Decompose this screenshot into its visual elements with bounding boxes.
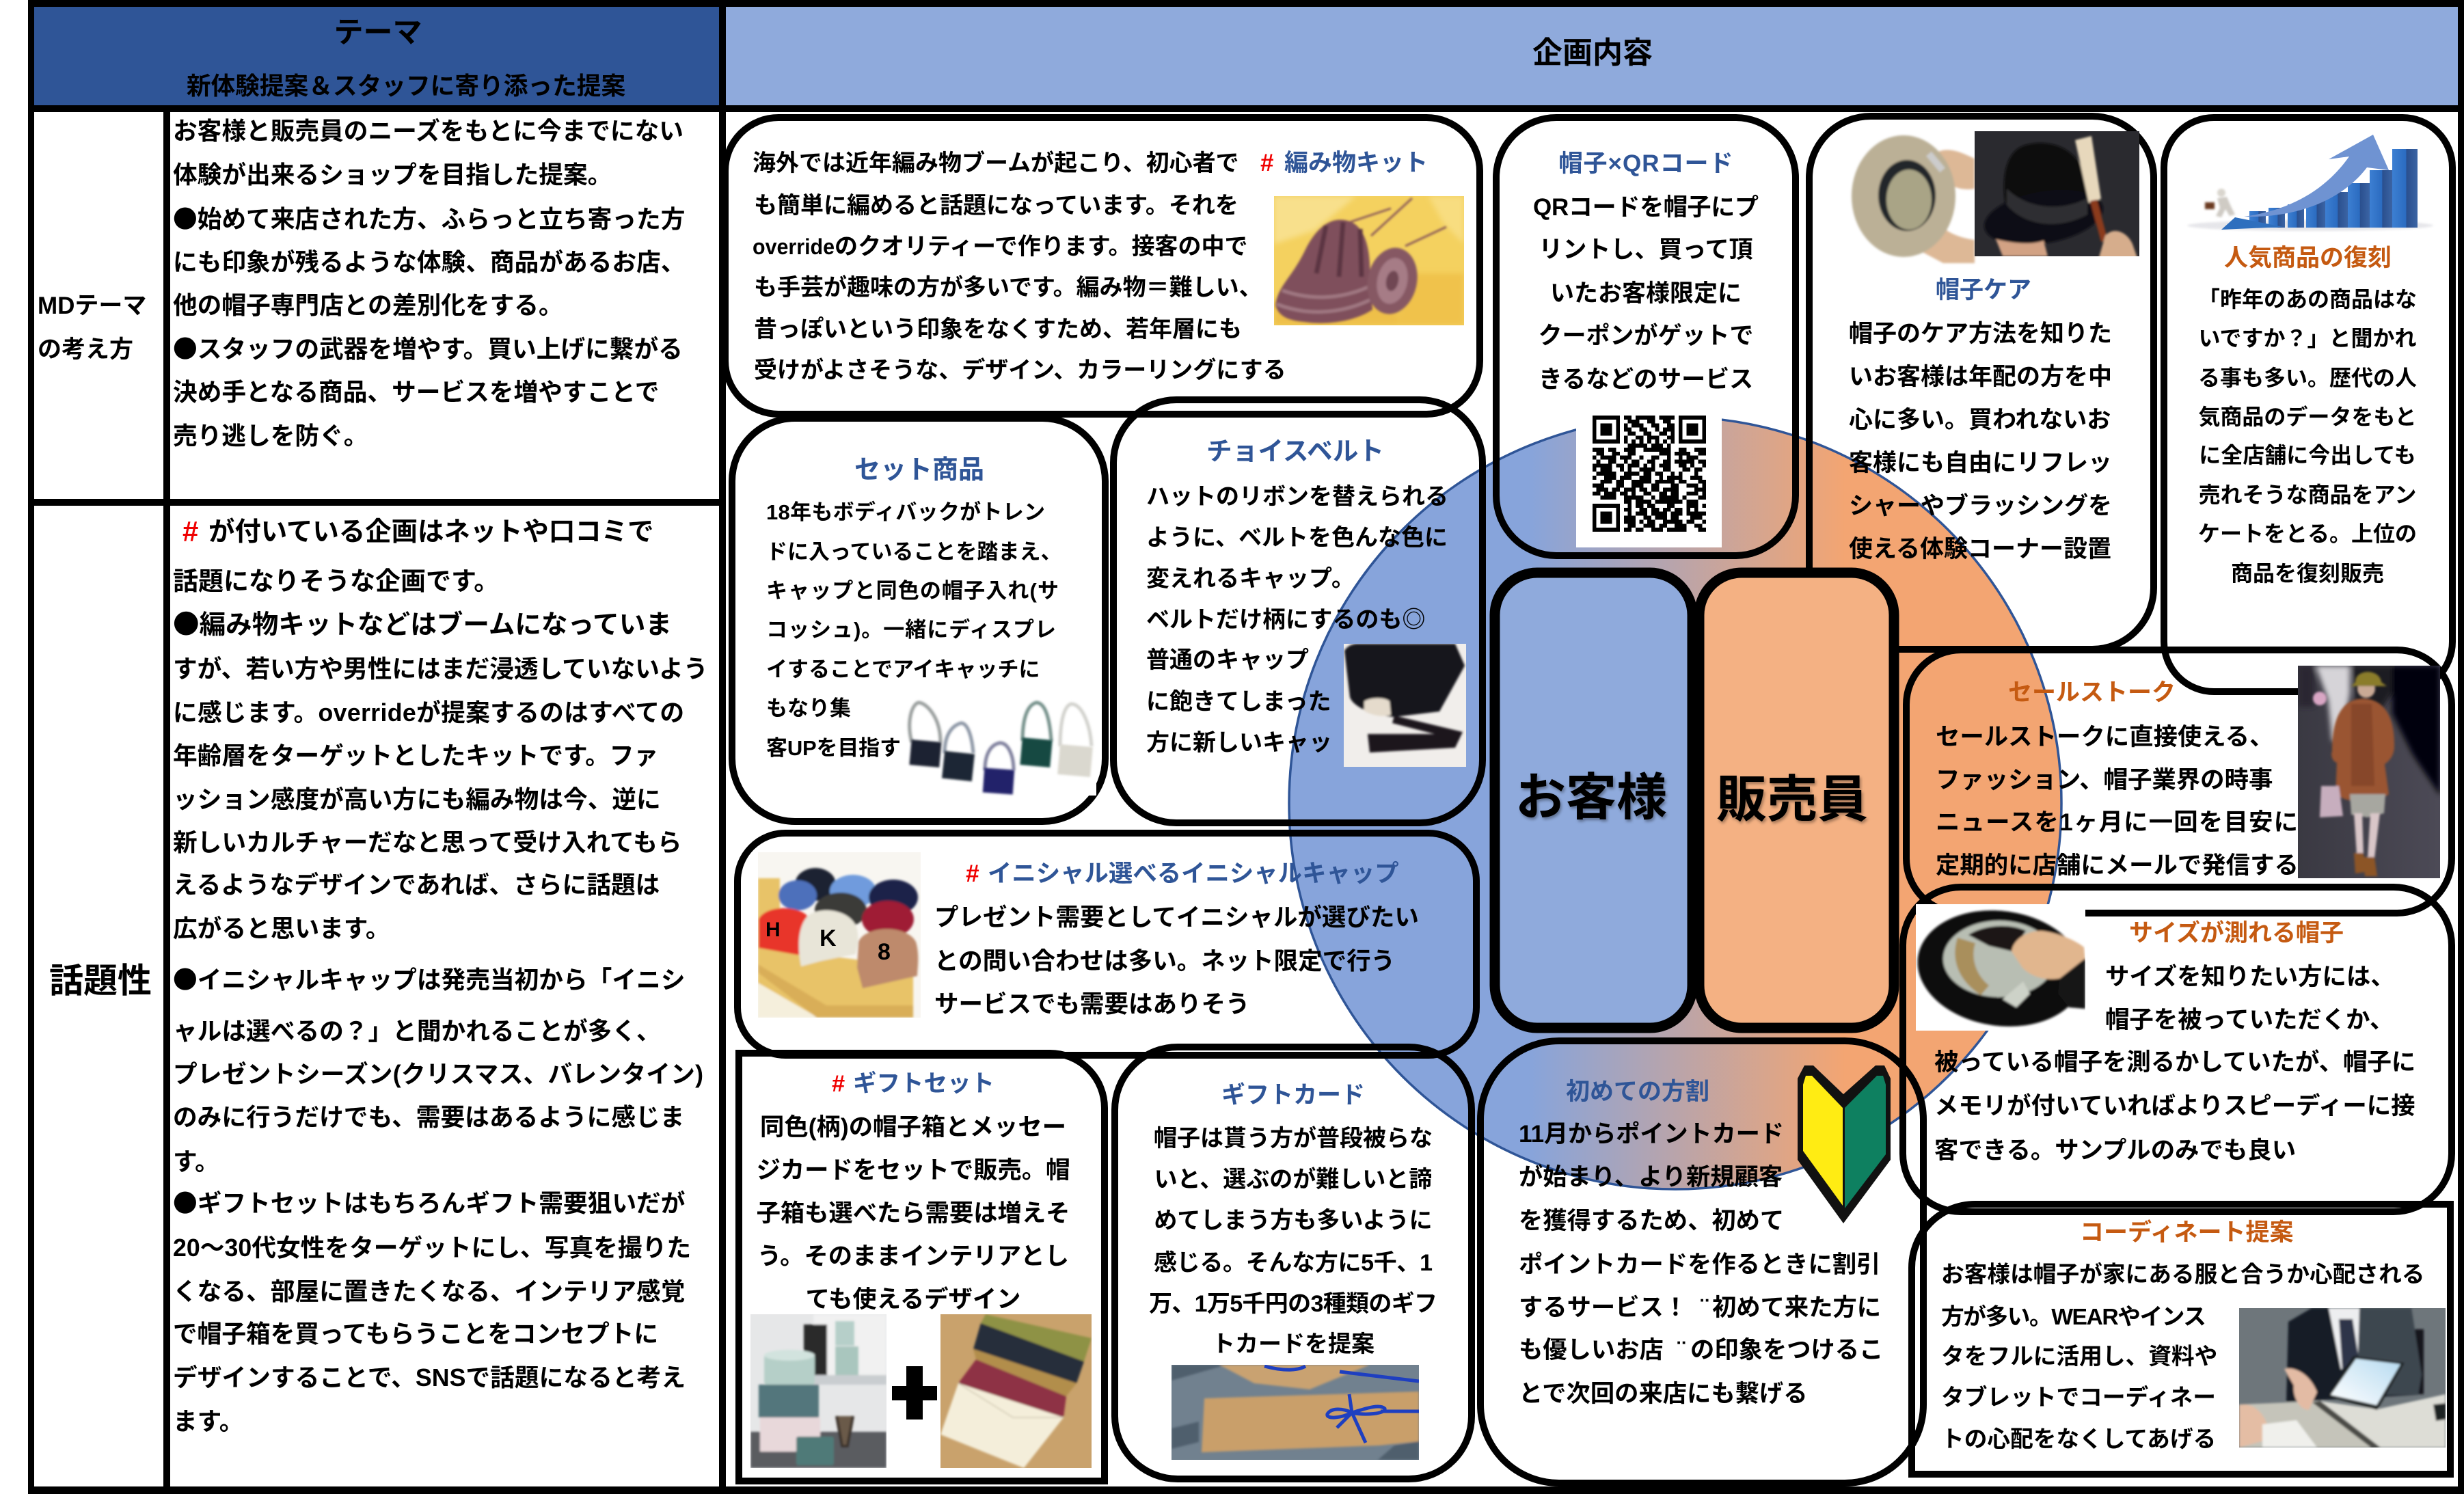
text block: topicality: のみに行うだけでも、需要はあるように感じま bbox=[173, 1104, 684, 1131]
header: theme bbox=[34, 7, 719, 105]
panel: gift set bbox=[739, 1053, 1105, 1481]
sales talk body text: 定期的に店舗にメールで発信する bbox=[1936, 852, 2299, 879]
text block: topicality: ●ギフトセットはもちろんギフト需要狙いだが bbox=[173, 1184, 685, 1219]
knitting kit body text bbox=[753, 150, 1286, 383]
heading: plan content: 企画内容 bbox=[1532, 36, 1653, 70]
text block: topicality: ●編み物キットなどはブームになっていま bbox=[173, 603, 672, 642]
revival body text bbox=[2198, 287, 2417, 586]
text block: MD theme thinking: 体験が出来るショップを目指した提案。 bbox=[173, 161, 612, 189]
text block: topicality: くなる、部屋に置きたくなる、インテリア感覚 bbox=[173, 1278, 685, 1305]
center box: sales staff: 販売員 bbox=[1716, 771, 1868, 828]
text block: MD theme thinking: 他の帽子専門店との差別化をする。 bbox=[173, 292, 563, 319]
photo: cap with belt bbox=[1344, 644, 1466, 767]
photo: hat boxes bbox=[750, 1314, 886, 1468]
photo: beige hat with hand bbox=[1852, 135, 1975, 263]
text block: topicality: すが、若い方や男性にはまだ浸透していないよう bbox=[173, 655, 708, 683]
coordinate body text: 方が多い。WEARやインス bbox=[1941, 1303, 2206, 1330]
row label: topicality: 話題性 bbox=[49, 962, 152, 1000]
text block: topicality: 年齢層をターゲットとしたキットです。ファ bbox=[173, 742, 658, 770]
choice belt body text bbox=[1146, 484, 1448, 756]
photo: initial caps: 8 bbox=[878, 939, 891, 965]
gift set body text: う。そのままインテリアとし bbox=[757, 1243, 1069, 1270]
gift card body text: 感じる。そんな方に5千、1 bbox=[1154, 1250, 1433, 1276]
revival body text: ケートをとる。上位の bbox=[2198, 521, 2417, 546]
panel: choice belt bbox=[1113, 400, 1483, 823]
knitting kit title: # bbox=[1260, 150, 1273, 176]
center box: customers: お客様 bbox=[1515, 769, 1667, 826]
gift card body text: いと、選ぶのが難しいと諦 bbox=[1154, 1166, 1432, 1193]
knitting kit body text: 海外では近年編み物ブームが起こり、初心者で bbox=[753, 150, 1239, 176]
size hat body text: 被っている帽子を測るかしていたが、帽子に bbox=[1934, 1048, 2415, 1076]
panel: hat care bbox=[1809, 116, 2154, 649]
text block: topicality: 20～30代女性をターゲットにし、写真を撮りた bbox=[173, 1234, 691, 1262]
size hat body text: サイズを知りたい方には、 bbox=[2105, 963, 2395, 990]
initial cap body text bbox=[934, 904, 1419, 1018]
set product body text bbox=[766, 500, 1061, 760]
choice belt body text: 普通のキャップ bbox=[1146, 647, 1309, 673]
QR body text: QRコードを帽子にプ bbox=[1533, 194, 1759, 221]
row label: MD theme bbox=[38, 293, 146, 363]
text block: topicality bbox=[173, 515, 708, 1435]
knitting kit body text: 受けがよさそうな、デザイン、カラーリングにする bbox=[754, 357, 1286, 383]
size hat body text: 帽子を被っていただくか、 bbox=[2105, 1006, 2394, 1033]
coordinate body text: お客様は帽子が家にある服と合うか心配される bbox=[1941, 1261, 2424, 1288]
revival body text: 売れそうな商品をアン bbox=[2199, 483, 2416, 507]
choice belt body text: ように、ベルトを色んな色に bbox=[1146, 525, 1448, 551]
revival body text: 「昨年のあの商品はな bbox=[2198, 287, 2417, 312]
hat care body text: 心に多い。買われないお bbox=[1849, 407, 2111, 433]
first-timer discount body text: が始まり、より新規顧客 bbox=[1519, 1164, 1783, 1191]
set product body text: キャップと同色の帽子入れ(サ bbox=[766, 579, 1059, 603]
gift card body text: 万、1万5千円の3種類のギフ bbox=[1149, 1291, 1437, 1317]
size hat body text: メモリが付いていればよりスピーディーに接 bbox=[1934, 1092, 2415, 1119]
first-timer discount body text bbox=[1519, 1121, 1883, 1407]
text block: topicality: ます。 bbox=[173, 1408, 243, 1435]
size hat title: サイズが測れる帽子 bbox=[2129, 919, 2344, 947]
center box: customers bbox=[1495, 573, 1692, 1028]
QR body text: リントし、買って頂 bbox=[1539, 236, 1753, 263]
knitting kit body text: も簡単に編めると話題になっています。それを bbox=[754, 193, 1238, 219]
hat care body text: シャーやブラッシングを bbox=[1849, 492, 2112, 519]
coordinate body text: トの心配をなくしてあげる bbox=[1941, 1426, 2216, 1452]
knitting kit body text: も手芸が趣味の方が多いです。編み物＝難しい、 bbox=[754, 274, 1262, 301]
gift set body text: 子箱も選べたら需要は増えそ bbox=[757, 1200, 1070, 1227]
sales talk body text bbox=[1936, 723, 2299, 879]
text block: topicality: ャルは選べるの？」と聞かれることが多く、 bbox=[173, 1018, 661, 1045]
first-timer discount body text: の印象をつけるこ bbox=[1690, 1337, 1883, 1363]
text block: topicality: 話題になりそうな企画です。 bbox=[173, 567, 499, 595]
initial cap body text: プレゼント需要としてイニシャルが選びたい bbox=[934, 904, 1419, 931]
sales talk body text: セールストークに直接使える、 bbox=[1936, 723, 2273, 750]
photo: initial caps: H bbox=[766, 919, 781, 941]
text block: topicality: ●イニシャルキャップは発売当初から「イニシ bbox=[173, 961, 685, 996]
gift set title: # bbox=[832, 1071, 845, 1097]
set product body text: もなり集 bbox=[766, 696, 851, 720]
knitting kit title: 編み物キット bbox=[1284, 150, 1428, 176]
panel: popular product revival bbox=[2164, 118, 2452, 692]
photo: initial caps bbox=[758, 852, 921, 1018]
photo: initial caps: K bbox=[820, 925, 837, 951]
header: plan content bbox=[726, 7, 2458, 105]
text block: topicality: プレゼントシーズン(クリスマス、バレンタイン) bbox=[173, 1061, 703, 1088]
gift set body text: 同色(柄)の帽子箱とメッセー bbox=[760, 1114, 1066, 1141]
coordinate title: コーディネート提案 bbox=[2080, 1219, 2294, 1246]
gift set body text: ても使えるデザイン bbox=[806, 1286, 1020, 1313]
hat care title: 帽子ケア bbox=[1936, 277, 2031, 303]
set product title: セット商品 bbox=[854, 456, 984, 485]
panel: QR code bbox=[1496, 118, 1796, 556]
set product body text: ドに入っていることを踏まえ、 bbox=[766, 540, 1061, 564]
photo: envelopes bbox=[940, 1314, 1092, 1468]
sales talk body text: ファッション、帽子業界の時事 bbox=[1936, 766, 2273, 793]
gift set title: ギフトセット bbox=[853, 1071, 994, 1097]
initial cap title: # bbox=[966, 860, 979, 887]
text block: topicality: が付いている企画はネットや口コミで bbox=[208, 517, 653, 547]
revival body text: る事も多い。歴代の人 bbox=[2198, 366, 2417, 390]
text block: topicality: に感じます。overrideが提案するのはすべての bbox=[173, 699, 684, 726]
QR body text: クーポンがゲットで bbox=[1538, 323, 1754, 349]
hat care body text: 客様にも自由にリフレッ bbox=[1849, 450, 2112, 476]
coordinate body text: タブレットでコーディネー bbox=[1941, 1384, 2216, 1411]
gift set body text: ジカードをセットで販売。帽 bbox=[757, 1157, 1070, 1184]
first-timer discount body text: 初めて来た方に bbox=[1712, 1294, 1881, 1321]
revival title: 人気商品の復刻 bbox=[2224, 245, 2392, 271]
knitting kit body text: override bbox=[753, 234, 835, 259]
text block: MD theme thinking: ●スタッフの武器を増やす。買い上げに繋がる bbox=[173, 330, 683, 365]
row label: MD theme: MDテーマ bbox=[38, 293, 146, 319]
subtitle: theme: 新体験提案＆スタッフに寄り添った提案 bbox=[187, 72, 625, 100]
first-timer discount body text: するサービス！ bbox=[1519, 1294, 1688, 1321]
gift card title: ギフトカード bbox=[1221, 1082, 1365, 1109]
set product body text: コッシュ)。一緒にディスプレ bbox=[766, 618, 1056, 642]
text block: MD theme thinking: 決め手となる商品、サービスを増やすことで bbox=[173, 379, 660, 406]
gift set body text bbox=[757, 1114, 1070, 1313]
photo: staff with tablet bbox=[2239, 1308, 2446, 1448]
choice belt body text: ベルトだけ柄にするのも◎ bbox=[1146, 601, 1425, 634]
text block: topicality: # bbox=[182, 515, 198, 547]
set product body text: 18年もボディバックがトレン bbox=[766, 500, 1045, 524]
panel: hat that measures size bbox=[1903, 887, 2452, 1212]
gift card body text bbox=[1149, 1125, 1437, 1357]
QR body text: きるなどのサービス bbox=[1539, 366, 1753, 393]
panel: sales talk bbox=[1906, 650, 2452, 913]
image: rising bar chart and arrow bbox=[2187, 135, 2433, 231]
text block: topicality: デザインすることで、SNSで話題になると考え bbox=[173, 1364, 686, 1391]
choice belt body text: 変えれるキャップ。 bbox=[1146, 566, 1355, 592]
first-timer discount body text: 11月からポイントカード bbox=[1519, 1121, 1784, 1147]
set product body text: 客UPを目指す bbox=[766, 736, 901, 760]
initial cap body text: サービスでも需要はありそう bbox=[934, 990, 1250, 1018]
background circle linking customer and staff bbox=[1289, 417, 2061, 1189]
revival body text: 商品を復刻販売 bbox=[2231, 561, 2384, 586]
text block: topicality: す。 bbox=[173, 1148, 219, 1176]
revival body text: に全店舗に今出しても bbox=[2199, 443, 2416, 467]
choice belt body text: ハットのリボンを替えられる bbox=[1146, 484, 1448, 510]
text block: MD theme thinking bbox=[173, 118, 685, 450]
size hat body text bbox=[1934, 963, 2415, 1164]
gift card body text: トカードを提案 bbox=[1212, 1331, 1375, 1357]
set product body text: イすることでアイキャッチに bbox=[766, 657, 1040, 681]
icon: beginner driver mark bbox=[1798, 1065, 1891, 1223]
QR title: 帽子×QRコード bbox=[1558, 150, 1733, 177]
choice belt body text: に飽きてしまった bbox=[1146, 689, 1331, 715]
first-timer discount body text: を獲得するため、初めて bbox=[1519, 1208, 1784, 1234]
hat care body text: 帽子のケア方法を知りた bbox=[1849, 321, 2112, 347]
photo: black hat and brush bbox=[1975, 131, 2139, 260]
photo: runway model in fur coat bbox=[2298, 666, 2440, 878]
panel: coordinate proposal bbox=[1912, 1204, 2450, 1474]
panel: first-timer discount bbox=[1480, 1041, 1923, 1483]
panel: set product bbox=[732, 418, 1105, 821]
icon: plus sign bbox=[892, 1366, 937, 1420]
coordinate body text: タをフルに活用し、資料や bbox=[1941, 1344, 2217, 1370]
revival body text: いですか？」と聞かれ bbox=[2198, 326, 2417, 351]
initial cap body text: との問い合わせは多い。ネット限定で行う bbox=[934, 947, 1395, 975]
QR code image bbox=[1576, 410, 1722, 547]
text block: MD theme thinking: お客様と販売員のニーズをもとに今までにない bbox=[173, 118, 683, 145]
coordinate body text bbox=[1941, 1261, 2424, 1452]
first-timer discount body text: ポイントカードを作るときに割引 bbox=[1519, 1251, 1880, 1278]
knitting kit body text: 昔っぽいという印象をなくすため、若年層にも bbox=[754, 316, 1242, 342]
sales talk body text: ニュースを1ヶ月に一回を目安に bbox=[1936, 809, 2298, 836]
first-timer discount body text: も優しいお店 bbox=[1519, 1337, 1664, 1363]
photo: sacoche bags bbox=[906, 700, 1096, 796]
gift card body text: めてしまう方も多いように bbox=[1154, 1208, 1433, 1234]
center box: sales staff bbox=[1699, 573, 1894, 1028]
heading: theme: テーマ bbox=[334, 16, 422, 49]
knitting kit body text: のクオリティーで作ります。接客の中で bbox=[835, 234, 1248, 260]
size hat body text: 客できる。サンプルのみでも良い bbox=[1934, 1137, 2296, 1164]
photo: knit hat and yarn bbox=[1274, 196, 1464, 325]
QR body text: いたお客様限定に bbox=[1550, 280, 1742, 307]
text block: MD theme thinking: 売り逃しを防ぐ。 bbox=[173, 422, 368, 450]
panel: gift card bbox=[1115, 1047, 1472, 1479]
panel: initial cap bbox=[737, 833, 1476, 1055]
hat care body text bbox=[1849, 321, 2112, 562]
QR body text bbox=[1533, 194, 1759, 393]
text block: topicality: えるようなデザインであれば、さらに話題は bbox=[173, 871, 660, 899]
text block: topicality: 新しいカルチャーだなと思って受け入れてもら bbox=[173, 829, 681, 856]
revival body text: 気商品のデータをもと bbox=[2198, 405, 2417, 429]
text block: MD theme thinking: ●始めて来店された方、ふらっと立ち寄った方 bbox=[173, 200, 685, 235]
text block: topicality: ッション感度が高い方にも編み物は今、逆に bbox=[173, 786, 661, 813]
photo: hat size gauge bbox=[1916, 904, 2085, 1031]
text block: topicality: で帽子箱を買ってもらうことをコンセプトに bbox=[173, 1320, 658, 1348]
panel: knitting kit bbox=[725, 118, 1480, 414]
sales talk title: セールストーク bbox=[2008, 679, 2176, 706]
initial cap title: イニシャル選べるイニシャルキャップ bbox=[988, 860, 1399, 887]
choice belt body text: 方に新しいキャッ bbox=[1146, 730, 1332, 756]
choice belt title: チョイスベルト bbox=[1206, 437, 1384, 465]
gift card body text: 帽子は貰う方が普段被らな bbox=[1154, 1125, 1433, 1152]
row label: MD theme: の考え方 bbox=[38, 336, 133, 363]
first-timer discount body text: ¨ bbox=[1677, 1337, 1685, 1363]
text block: MD theme thinking: にも印象が残るような体験、商品があるお店、 bbox=[173, 249, 685, 276]
hat care body text: 使える体験コーナー設置 bbox=[1849, 536, 2111, 562]
first-timer discount body text: とで次回の来店にも繋げる bbox=[1519, 1381, 1808, 1407]
text block: topicality: 広がると思います。 bbox=[173, 915, 390, 942]
first-timer discount body text: ¨ bbox=[1701, 1294, 1709, 1321]
photo: gift card envelope with ribbon bbox=[1172, 1365, 1419, 1460]
first-timer discount title: 初めての方割 bbox=[1566, 1078, 1709, 1105]
hat care body text: いお客様は年配の方を中 bbox=[1849, 364, 2112, 390]
